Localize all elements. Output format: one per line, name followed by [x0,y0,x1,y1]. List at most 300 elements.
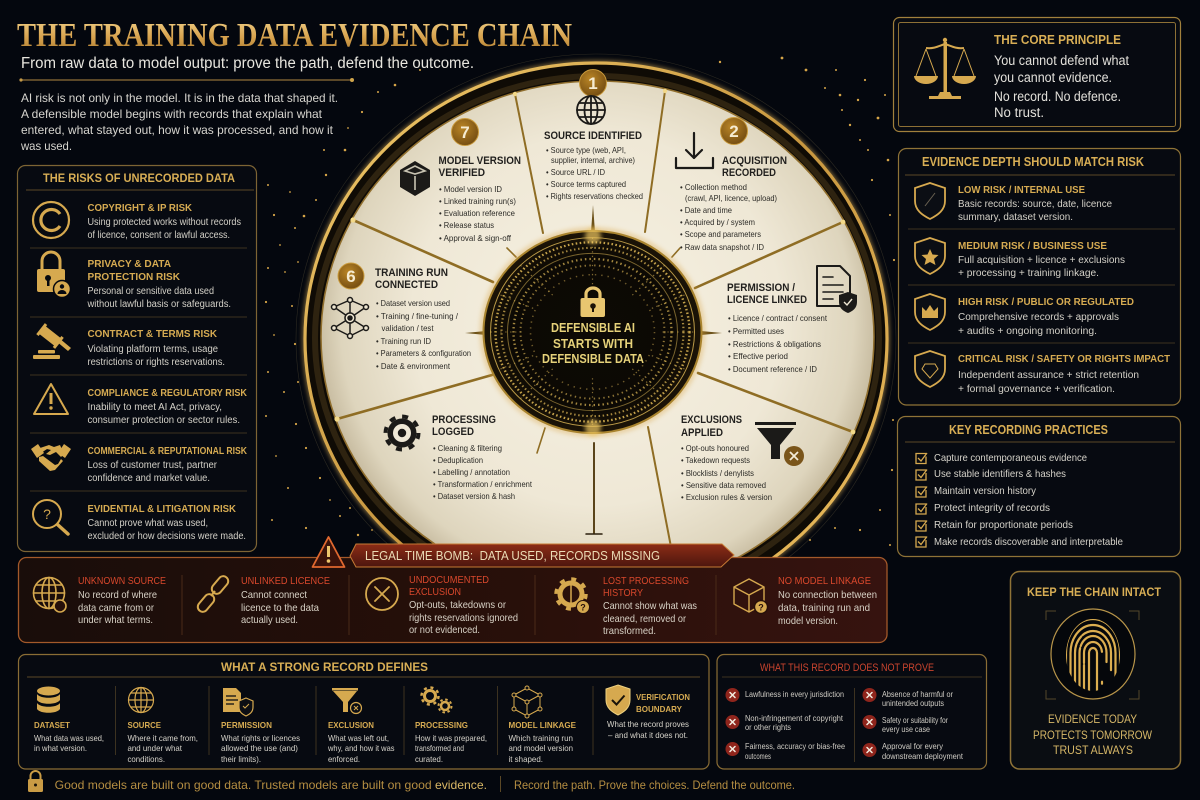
icon: broken link [196,574,230,614]
heading [722,155,787,179]
title: THE TRAINING DATA EVIDENCE CHAIN [17,17,572,54]
checklist: • Parameters & configuration [376,348,471,358]
red x markers [726,688,876,757]
text: allowed the use (and) [221,743,298,753]
risk: privacy [37,252,231,310]
text: enforced. [328,754,360,764]
text: Basic records: source, date, licence [958,199,1112,210]
not-proven list: Approval for every [882,742,943,751]
icon: network [332,298,368,338]
heading [375,267,448,291]
icon: shield crown [915,294,945,330]
column: verification boundary [606,685,690,740]
text [958,296,1134,337]
text: PROCESSING [415,720,468,730]
text [88,387,247,426]
text: PROTECTION RISK [88,271,180,283]
not-proven list: Fairness, accuracy or bias-free [745,742,845,751]
text: Using protected works without records [88,217,241,228]
heading: MODEL VERSION [438,155,521,167]
risk: commercial [31,444,247,484]
panel: evidence depth [898,148,1180,405]
practices list: Use stable identifiers & hashes [934,468,1066,480]
tier: critical risk [915,351,1171,395]
checklist: • Raw data snapshot / ID [680,242,764,252]
practices list [934,452,1123,548]
text: SOURCE [128,720,161,730]
icon: gear question [556,579,590,614]
heading: ACQUISITION [722,155,787,167]
footer text: Good models are built on good data. Trusted models are built on good evidence. [55,778,487,792]
heading: SOURCE IDENTIFIED [544,130,642,142]
checklist [728,313,828,374]
checklist: • Evaluation reference [439,208,515,218]
footer text [55,776,795,792]
checklist: • Source URL / ID [546,167,605,177]
not-proven list: Lawfulness in every jurisdiction [745,690,844,699]
footer message [28,771,795,792]
step 2: acquisition recorded [676,118,787,252]
text: What was left out, [328,733,389,743]
gap: lost processing history [556,575,697,637]
checklist: • Transformation / enrichment [433,479,533,489]
badge 2: 2 [729,122,739,141]
chain message: PROTECTS TOMORROW [1033,728,1153,742]
practices list: Protect integrity of records [934,502,1050,514]
text: cleaned, removed or [603,613,686,625]
text: DATASET [34,720,71,730]
text: HISTORY [603,587,643,599]
heading [438,155,521,179]
gold particle field [265,57,895,546]
gap: unlinked licence [196,574,330,626]
checklist: • Permitted uses [728,326,784,336]
icon: x circle [366,578,398,610]
subtitle: From raw data to model output: prove the path, defend the outcome. [21,55,474,72]
text: HIGH RISK / PUBLIC OR REGULATED [958,296,1134,308]
banner text: LEGAL TIME BOMB: DATA USED, RECORDS MISSING [365,548,660,563]
column: source [128,688,198,764]
intro text [20,91,338,153]
checklist: • Document reference / ID [728,364,817,374]
panel: key recording practices [898,416,1180,556]
heading: VERIFIED [438,167,485,179]
tier: medium risk [915,238,1125,279]
heading: THE CORE PRINCIPLE [994,32,1121,47]
text: data, training run and [778,602,870,614]
text: What data was used, [34,733,104,743]
not-proven list: downstream deployment [882,752,964,761]
icon: gavel [33,323,71,359]
principle text: you cannot evidence. [994,70,1112,85]
heading [432,414,496,438]
text: How it was prepared, [415,733,487,743]
icon: document shield [223,688,253,716]
text [958,184,1112,223]
step 3: permission licence linked [727,266,857,374]
text: Which training run [508,733,573,743]
principle text: You cannot defend what [994,53,1129,68]
icon: padlock with person [37,252,70,298]
panel heading: EVIDENCE DEPTH SHOULD MATCH RISK [922,155,1144,169]
not-proven list: unintended outputs [882,699,944,708]
text: and under what [128,743,183,753]
text [409,574,518,636]
text: actually used. [241,614,298,626]
principle text [994,53,1129,120]
checklist: validation / test [382,323,434,333]
column: exclusion [327,688,394,764]
not-proven list: Absence of harmful or [882,690,953,699]
badge 6: 6 [346,267,356,286]
text [508,720,576,764]
checklist: • Collection method [680,182,747,192]
panel: what this record does not prove [717,654,986,769]
panel: risks of unrecorded data [18,166,256,552]
text: curated. [415,754,443,764]
text [78,575,166,626]
icon: gold shield [606,685,630,715]
heading: PROCESSING [432,414,496,426]
checklist: • Licence / contract / consent [728,313,828,323]
text: and model version [508,743,573,753]
checklist: • Opt-outs honoured [681,443,749,453]
icon: shield star [915,238,945,274]
icon: fingerprint [1046,609,1139,699]
wheel spokes [337,91,853,547]
text: or not evidenced. [409,624,480,636]
chain message [1033,712,1153,757]
badge 1: 1 [588,74,598,93]
icon: warning [312,537,344,567]
icon: copyright [33,202,69,238]
checklist icons [916,453,927,547]
text: transformed and [415,743,464,753]
step 7: model version verified [400,118,521,243]
text: Loss of customer trust, partner [88,460,218,471]
risk: compliance [34,384,247,426]
checklist: (crawl, API, licence, upload) [685,193,777,203]
practices list: Capture contemporaneous evidence [934,452,1087,464]
not-proven list [745,690,964,761]
checklist: • Approval & sign-off [439,233,512,243]
icon: funnel x [332,688,362,714]
checklist: • Sensitive data removed [681,480,766,490]
text [958,240,1125,279]
checklist: • Date & environment [376,361,451,371]
footer text: Record the path. Prove the choices. Defend the outcome. [514,778,795,792]
checklist [680,182,777,252]
icon: footer lock [28,771,43,792]
checklist [439,184,516,243]
heading: LICENCE LINKED [727,294,807,306]
text: Violating platform terms, usage [88,344,218,355]
text: UNKNOWN SOURCE [78,575,166,587]
heading: APPLIED [681,427,723,439]
icon: download [676,133,713,168]
hub message [542,321,644,366]
text: Independent assurance + strict retention [958,370,1139,381]
text [128,720,198,764]
icon: shield diamond [915,351,945,387]
practices list: Make records discoverable and interpretable [934,536,1123,548]
checklist: • Model version ID [439,184,502,194]
step 1: source identified [544,70,643,201]
text [34,720,104,753]
icon: cube question: ? [758,602,764,612]
text: + audits + ongoing monitoring. [958,326,1097,337]
checklist: • Restrictions & obligations [728,339,821,349]
text: their limits). [221,754,261,764]
text: EXCLUSION [328,720,374,730]
icon: cube nodes [512,686,542,718]
text: NO MODEL LINKAGE [778,575,871,587]
panel: keep the chain intact [1010,572,1180,769]
risk: contract [33,323,225,368]
text [603,575,697,637]
hub message: DEFENSIBLE DATA [542,352,644,366]
text: transformed. [603,625,656,637]
text: MODEL LINKAGE [508,720,576,730]
checklist: • Deduplication [433,455,483,465]
icon: central lock [580,288,605,317]
evidence chain wheel [296,54,896,624]
tier: low risk [915,183,1112,223]
checklist: • Training run ID [376,336,431,346]
checklist [681,443,772,502]
practices list: Retain for proportionate periods [934,519,1073,531]
icon: magnifier question [33,500,68,534]
icon: handshake [31,444,71,471]
step 6: training run connected [332,263,471,371]
column: dataset [34,686,104,753]
text: BOUNDARY [636,704,682,714]
central hub [480,227,706,437]
text: UNDOCUMENTED [409,574,489,586]
checklist: supplier, internal, archive) [551,155,635,165]
text [327,720,394,764]
text: Opt-outs, takedowns or [409,599,506,611]
text: + processing + training linkage. [958,268,1099,279]
intro text: A defensible model begins with records that explain what [21,107,323,121]
risk: copyright [33,202,241,241]
icon: globe question [34,578,66,612]
icon: globe [577,96,605,124]
panel: what a strong record defines [18,654,709,769]
text: LOW RISK / INTERNAL USE [958,184,1085,196]
checklist: • Acquired by / system [680,217,755,227]
checklist: • Source terms captured [546,179,626,189]
heading: TRAINING RUN [375,267,448,279]
checklist [433,443,533,501]
text: EXCLUSION [409,586,461,598]
icon: funnel with x [755,422,804,466]
intro text: was used. [20,139,72,153]
text: in what version. [34,743,87,753]
icon: magnifier question: ? [43,506,51,522]
text [88,328,225,368]
text: it shaped. [508,754,543,764]
step 4: exclusions applied [681,414,804,502]
icon: cube [400,161,430,196]
text: conditions. [128,754,165,764]
text: Comprehensive records + approvals [958,312,1119,323]
icon: warning triangle [34,384,68,414]
checklist: • Cleaning & filtering [433,443,502,453]
panel heading: KEY RECORDING PRACTICES [949,423,1108,437]
principle text: No record. No defence. [994,89,1121,104]
checklist: • Scope and parameters [680,229,761,239]
text [221,720,300,764]
heading: EXCLUSIONS [681,414,742,426]
intro text: AI risk is not only in the model. It is in the data that shaped it. [21,91,338,105]
text: Cannot show what was [603,600,697,612]
heading: PERMISSION / [727,282,795,294]
heading [727,282,807,306]
text [88,445,247,484]
panel heading: WHAT THIS RECORD DOES NOT PROVE [760,662,934,674]
column: processing [415,688,487,764]
checklist [546,145,643,201]
gap: no model linkage [734,575,877,627]
text [88,503,246,542]
panel: core principle [894,18,1180,132]
text: data came from or [78,602,154,614]
hub message: DEFENSIBLE AI [551,321,635,335]
text: restrictions or rights reservations. [88,357,225,368]
step 5: processing logged [386,414,533,501]
text: + formal governance + verification. [958,384,1115,395]
text: MEDIUM RISK / BUSINESS USE [958,240,1107,252]
checklist: • Linked training run(s) [439,196,516,206]
panel heading: WHAT A STRONG RECORD DEFINES [221,660,428,674]
text: – and what it does not. [608,730,688,740]
panel heading: KEEP THE CHAIN INTACT [1027,585,1162,599]
not-proven list: every use case [882,725,930,734]
text: CONTRACT & TERMS RISK [88,328,217,340]
text: CRITICAL RISK / SAFETY OR RIGHTS IMPACT [958,353,1171,365]
text: Full acquisition + licence + exclusions [958,255,1125,266]
panel heading: THE RISKS OF UNRECORDED DATA [43,171,235,185]
text [607,692,690,740]
icon: gears [422,688,452,712]
checklist: • Exclusion rules & version [681,492,772,502]
text: why, and how it was [327,743,394,753]
text: What the record proves [607,719,689,729]
badge 7: 7 [460,123,470,142]
text: UNLINKED LICENCE [241,575,330,587]
text: Cannot connect [241,589,307,601]
heading: RECORDED [722,167,776,179]
checklist: • Takedown requests [681,455,750,465]
text: COMPLIANCE & REGULATORY RISK [88,387,247,399]
text: No connection between [778,589,877,601]
text: Inability to meet AI Act, privacy, [88,402,222,413]
text: Where it came from, [128,733,198,743]
checklist: • Release status [439,220,494,230]
risk: evidential [33,500,246,542]
text: VERIFICATION [636,692,690,702]
checklist: • Labelling / annotation [433,467,510,477]
text [958,353,1171,395]
checklist: • Training / fine-tuning / [376,311,459,321]
chain message: TRUST ALWAYS [1053,743,1133,757]
checklist: • Dataset version & hash [433,491,515,501]
text [87,258,231,310]
text: without lawful basis or safeguards. [87,299,231,310]
heading: CONNECTED [375,279,438,291]
text: consumer protection or sector rules. [88,415,240,426]
text [778,575,877,627]
practices list: Maintain version history [934,485,1037,497]
icon: shield [915,183,945,219]
checklist [376,298,471,371]
heading: LOGGED [432,426,474,438]
icon: cube question [734,579,768,614]
text [241,575,330,626]
text: PRIVACY & DATA [88,258,171,270]
checklist: • Dataset version used [376,298,450,308]
chain message: EVIDENCE TODAY [1048,712,1137,726]
text: PERMISSION [221,720,272,730]
not-proven list: Non-infringement of copyright [745,714,844,723]
text: COPYRIGHT & IP RISK [88,202,192,214]
principle text: No trust. [994,105,1044,120]
text: No record of where [78,589,157,601]
text: rights reservations ignored [409,612,518,624]
checklist: • Rights reservations checked [546,191,643,201]
text: What rights or licences [221,733,300,743]
text: model version. [778,615,838,627]
checklist: • Blocklists / denylists [681,468,754,478]
icon: gear [386,416,418,450]
checklist: • Source type (web, API, [546,145,626,155]
checklist: • Effective period [728,351,788,361]
banner [312,537,734,567]
text: summary, dataset version. [958,212,1073,223]
icon: globe [128,688,154,712]
icon: gear question: ? [580,602,586,612]
column: model linkage [508,686,576,764]
not-proven list: outcomes [745,752,771,761]
gap: unknown source [34,575,166,626]
column: permission [221,688,300,764]
not-proven list: Safety or suitability for [882,716,948,725]
not-proven list: or other rights [745,723,791,732]
tier: high risk [915,294,1134,337]
gap: undocumented exclusion [366,574,518,636]
heading [681,414,742,439]
text: Personal or sensitive data used [88,286,214,297]
intro text: entered, what stayed out, how it was processed, and how it [21,123,334,137]
text: confidence and market value. [88,473,210,484]
text: EVIDENTIAL & LITIGATION RISK [88,503,236,515]
checklist: • Date and time [680,205,732,215]
hub message: STARTS WITH [553,337,633,351]
icon: document with shield [817,266,857,313]
icon: scales [914,38,976,99]
text: Cannot prove what was used, [88,518,208,529]
text: excluded or how decisions were made. [88,531,246,542]
text: licence to the data [241,602,319,614]
text [88,202,241,241]
panel: legal time bomb [18,537,887,642]
text [415,720,487,764]
text: COMMERCIAL & REPUTATIONAL RISK [88,445,247,457]
text: LOST PROCESSING [603,575,689,587]
text: of licence, consent or lawful access. [88,230,230,241]
text: under what terms. [78,614,153,626]
